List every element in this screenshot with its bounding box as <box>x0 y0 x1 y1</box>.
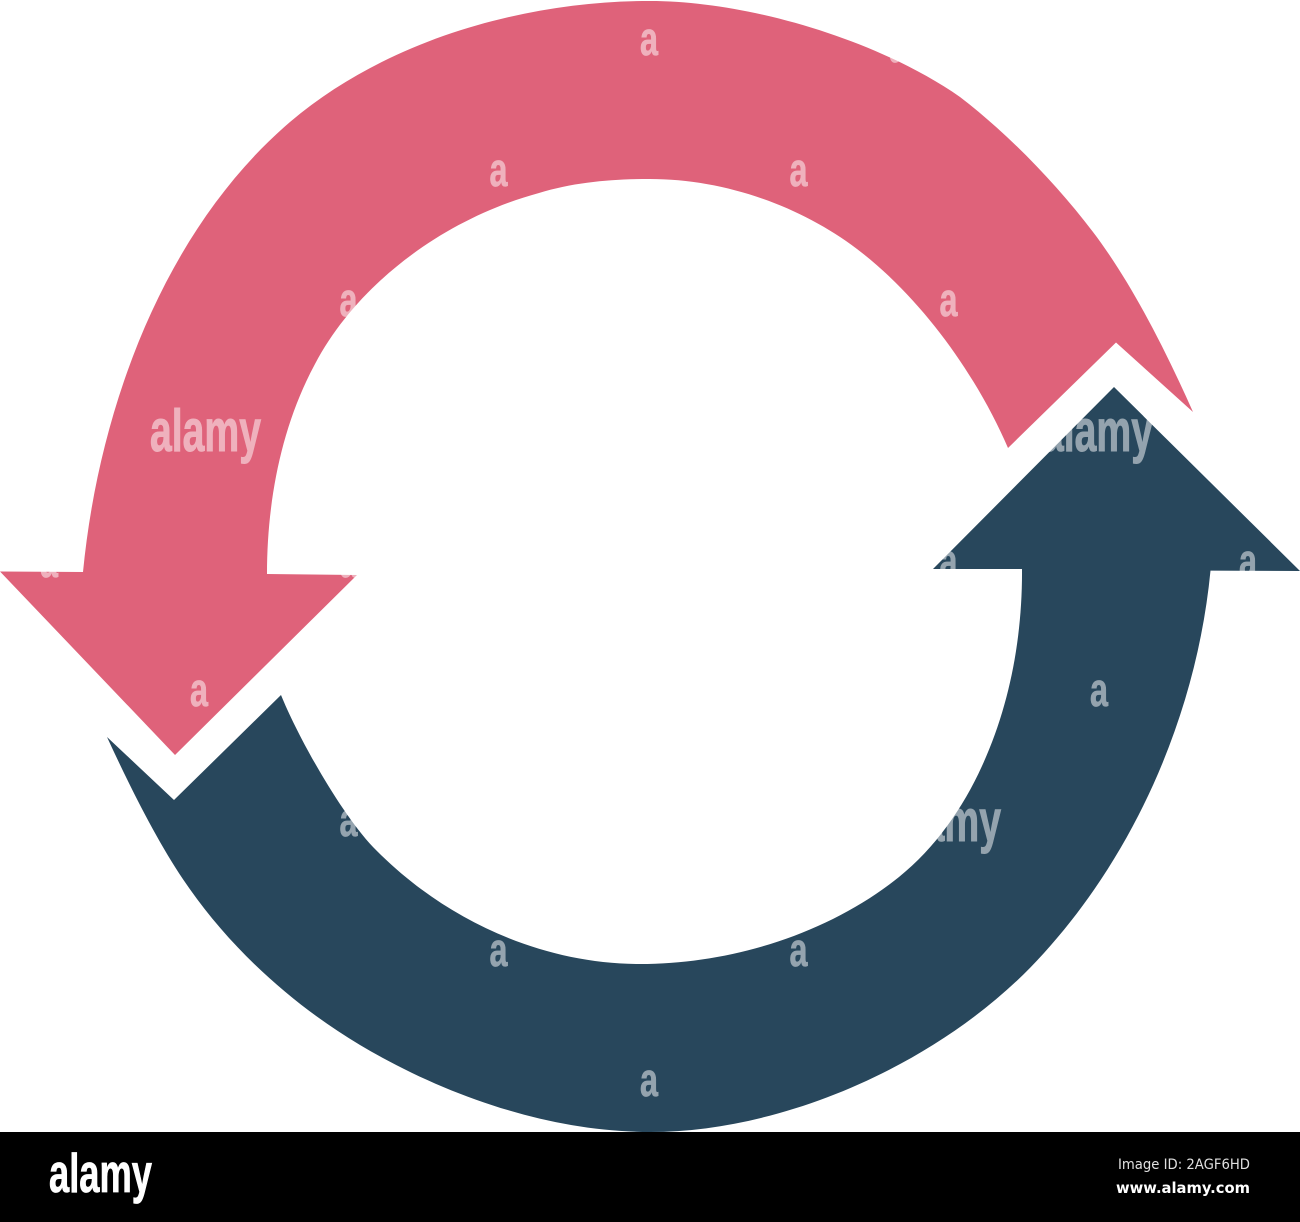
footer bar <box>0 1132 1300 1222</box>
watermark: small marks: a <box>40 534 59 587</box>
watermark: alamy lower right: alamy <box>890 788 1001 854</box>
watermark: small marks: a <box>940 273 958 326</box>
watermark: small marks: a <box>1239 534 1258 587</box>
watermark: alamy left: alamy <box>150 398 261 464</box>
watermark: small marks: a <box>340 793 358 846</box>
watermark: small marks: a <box>790 923 808 976</box>
watermark: small marks: a <box>340 273 358 326</box>
watermark: small marks: a <box>190 663 209 716</box>
watermark: small marks: a <box>1090 663 1109 716</box>
watermark: small marks: a <box>340 534 358 587</box>
pink arrow <box>0 1 1193 755</box>
watermark: small marks: a <box>889 19 908 72</box>
footer logo: alamy <box>49 1142 152 1204</box>
watermark: small marks: a <box>790 143 808 196</box>
watermark: small marks: a <box>490 143 508 196</box>
watermark: small marks: a <box>640 12 659 65</box>
watermark: alamy right: alamy <box>1042 398 1153 464</box>
watermark: small marks: a <box>940 534 958 587</box>
footer image id: Image ID: 2AGF6HD <box>1118 1157 1250 1173</box>
watermark: small marks: a <box>640 1053 659 1106</box>
footer url: www.alamy.com <box>1116 1179 1250 1197</box>
navy arrow <box>107 387 1300 1132</box>
watermark: small marks: a <box>490 923 508 976</box>
